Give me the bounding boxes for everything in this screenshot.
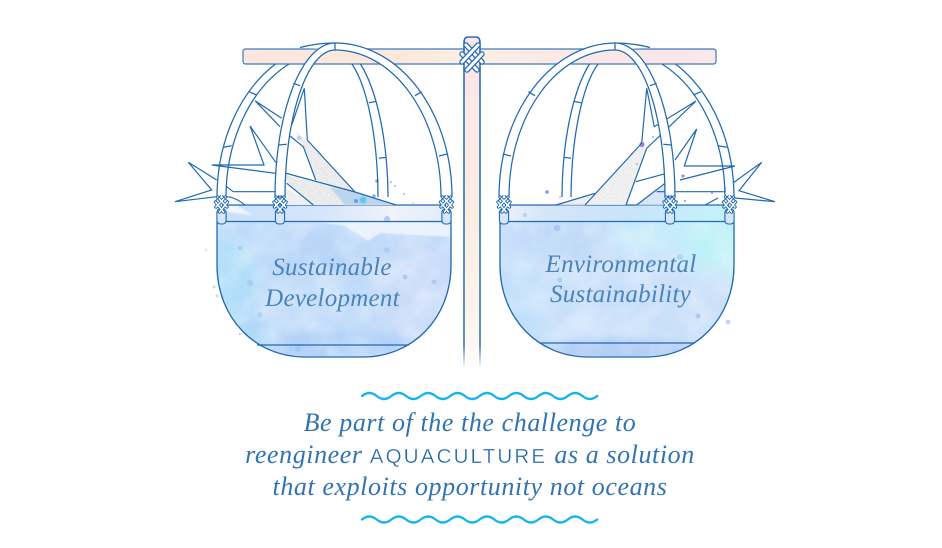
line 3: that exploits opportunity not oceans [273,472,667,501]
left basket outline [217,222,451,357]
right basket [495,43,775,365]
left outer splash dots [205,249,241,335]
left water body [217,205,451,356]
line 1: Be part of the the challenge to [304,408,636,437]
left basket [175,43,460,365]
left basket label: Sustainable [272,254,392,281]
right basket label: Sustainability [550,281,692,308]
closing statement [245,408,695,501]
right fish wash [545,136,713,205]
right fish outline [556,88,775,205]
right basket label: Environmental [545,251,696,278]
right basket outline [500,222,734,357]
left basket label: Development [264,285,401,312]
right outer splash dot [726,320,730,324]
left far handle leg [352,64,388,197]
left big handle, top and right leg [300,43,452,197]
left knots [216,196,452,224]
central knot [462,45,482,70]
left rim lines [222,205,446,345]
line 2: reengineer AQUACULTURE as a solution [245,440,695,469]
right knots [498,196,736,224]
right water body [500,205,734,356]
central post [464,37,480,370]
right rim lines [505,205,729,343]
right handle ticks [650,83,671,145]
bottom wave divider [362,516,597,522]
top wave divider [362,393,597,399]
left handle ticks [279,83,300,145]
right big handle, top and left leg [499,43,650,197]
left fish outline [175,88,396,205]
left front handle [275,43,335,197]
right far handle leg [562,64,598,197]
left big handle, left leg [217,64,289,197]
left fish wash [285,132,414,205]
balance beam [243,49,716,64]
right front handle [615,43,675,197]
right big handle, right leg [662,64,734,197]
